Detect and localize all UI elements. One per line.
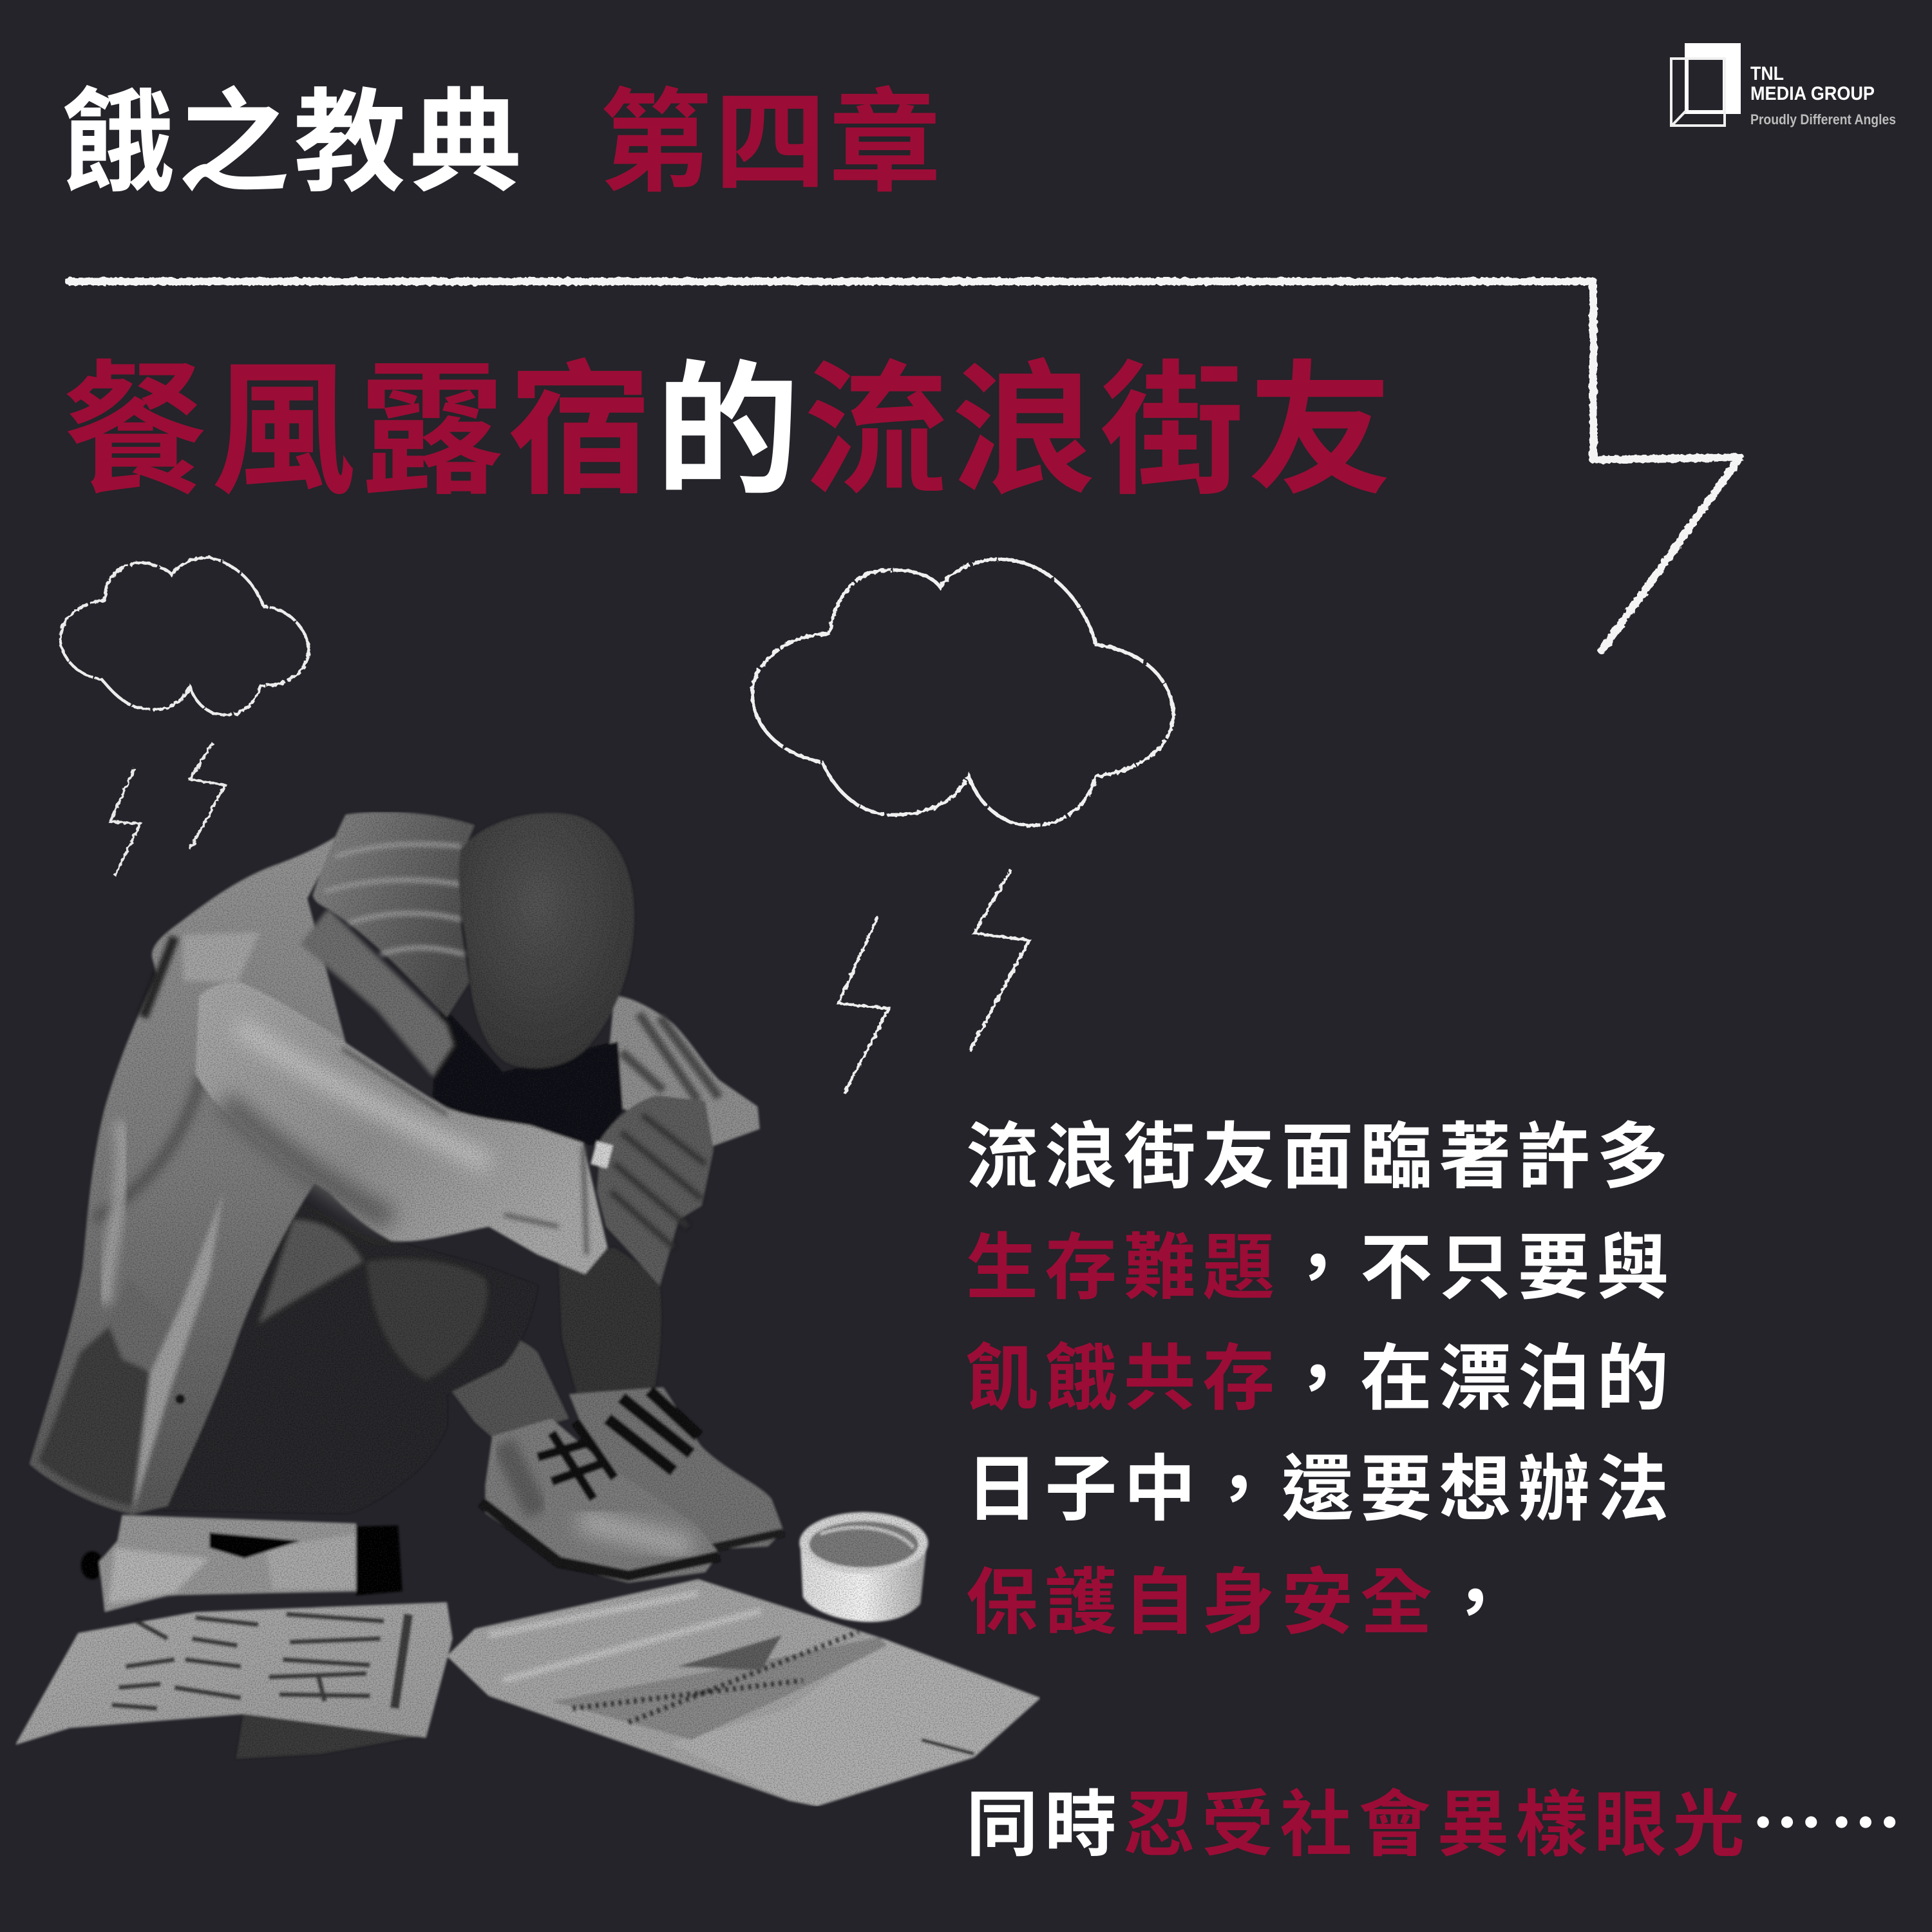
photo: seated homeless person with belongings [15,812,1040,1806]
near boot [482,1419,719,1583]
line 1: 流浪街友面臨著許多 [966,1099,1676,1203]
line 6: 同時忍受社會異樣眼光…… [966,1766,1908,1871]
cardboard shadow strip [236,1709,426,1759]
logo text [1750,63,1896,128]
collar [300,909,454,1077]
text: 第四章 [600,52,943,214]
title: chapter heading [62,52,943,214]
far arm sleeve [609,996,760,1146]
metal cup [799,1512,928,1622]
cardboard sign with handwriting [15,1602,453,1745]
far leg [558,1247,661,1405]
chalk cloud small [61,558,308,715]
trousers [160,1198,538,1513]
line 2: 生存難題，不只要與 [966,1209,1676,1314]
sleeve near arm [196,982,607,1274]
line 3: 飢餓共存，在漂泊的 [966,1320,1676,1425]
logo text: TNL [1750,63,1784,84]
logo text: MEDIA GROUP [1750,83,1875,104]
headline: 餐風露宿的流浪街友: 餐風露宿的流浪街友 [63,314,1396,523]
coat body [30,832,363,1514]
near shin [433,1331,569,1446]
flattened cardboard [447,1579,1040,1806]
lightning bolts small [110,743,225,876]
body text block [966,1099,1908,1871]
title: chapter heading: 餓之教典 [62,52,526,214]
far boot [569,1387,783,1549]
knit glove [591,1095,714,1286]
logo: TNL Media Group [1670,43,1896,128]
hair [313,812,475,1017]
flat cap [459,813,634,1068]
torso shadow [433,1003,623,1146]
lightning bolts large [838,870,1029,1094]
line 4: 日子中，還要想辦法 [966,1431,1676,1535]
chalk bracket line [69,281,1740,650]
bottle in paper bag [81,1515,402,1612]
line 5: 保護自身安全， [966,1544,1518,1649]
chalk cloud large [752,560,1173,826]
logo mark [1671,43,1741,126]
